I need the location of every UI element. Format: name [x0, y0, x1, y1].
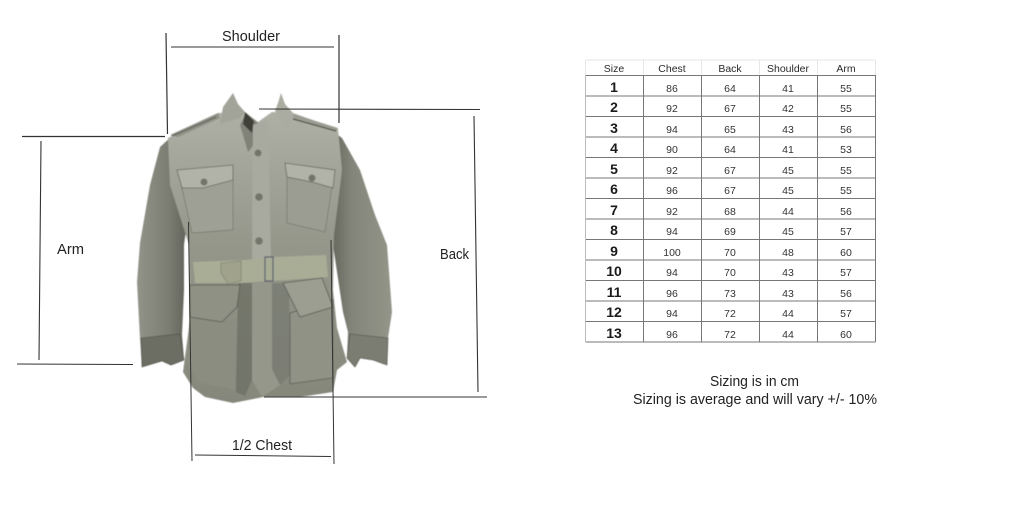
row 13: 13: [606, 325, 622, 341]
sizing note: Sizing is in cm: [710, 374, 799, 390]
row 13: 60: [840, 329, 852, 341]
row 6: 45: [782, 185, 794, 197]
jacket body: [168, 112, 347, 403]
row 10: 70: [724, 267, 736, 279]
row 8: 57: [840, 226, 852, 238]
row 6: 6: [610, 181, 618, 197]
row 1: 64: [724, 83, 736, 95]
row 6: 55: [840, 185, 852, 197]
row 9: 48: [782, 247, 794, 259]
row 11: 11: [607, 284, 622, 300]
row 11: [607, 284, 852, 300]
row 4: 41: [782, 144, 794, 156]
row 6: [610, 181, 852, 197]
row 2: [610, 99, 852, 115]
row 7: 92: [666, 206, 678, 218]
row 6: 67: [724, 185, 736, 197]
shoulder measurement: [166, 33, 339, 134]
row 10: 94: [666, 267, 678, 279]
row 5: 45: [782, 165, 794, 177]
row 5: 92: [666, 165, 678, 177]
table grid: [586, 60, 876, 342]
button placket: [252, 120, 271, 262]
row 3: [610, 120, 852, 136]
row 8: 69: [724, 226, 736, 238]
arm label: Arm: [57, 242, 84, 258]
row 13: 96: [666, 329, 678, 341]
row 4: 4: [610, 140, 618, 156]
sizing note: Sizing is average and will vary +/- 10%: [633, 392, 877, 408]
row 2: 42: [782, 103, 794, 115]
row 11: 96: [666, 288, 678, 300]
row 1: [610, 79, 852, 95]
row 8: 45: [782, 226, 794, 238]
shoulder label: Shoulder: [222, 29, 280, 45]
row 7: [610, 202, 852, 218]
belt: [193, 255, 328, 283]
row 3: 65: [724, 124, 736, 136]
row 1: 55: [840, 83, 852, 95]
row 3: 56: [840, 124, 852, 136]
row 2: 92: [666, 103, 678, 115]
row 5: 67: [724, 165, 736, 177]
row 7: 68: [724, 206, 736, 218]
row 5: [610, 161, 852, 177]
row 10: 57: [840, 267, 852, 279]
buttons: [254, 150, 262, 156]
row 5: 5: [610, 161, 618, 177]
body shading: [236, 283, 252, 396]
row 7: 44: [782, 206, 794, 218]
half chest measurement: [188, 222, 334, 464]
row 4: 53: [840, 144, 852, 156]
row 1: 86: [666, 83, 678, 95]
row 7: 56: [840, 206, 852, 218]
row 9: 100: [663, 247, 681, 259]
row 12: 72: [724, 308, 736, 320]
right sleeve: [325, 126, 392, 367]
row 13: 44: [782, 329, 794, 341]
half chest label: 1/2 Chest: [232, 438, 292, 454]
row 12: 94: [666, 308, 678, 320]
cuffs: [141, 334, 184, 367]
row 4: 90: [666, 144, 678, 156]
row 11: 43: [782, 288, 794, 300]
row 10: 10: [606, 263, 622, 279]
row 9: 70: [724, 247, 736, 259]
row 6: 96: [666, 185, 678, 197]
size table: [586, 60, 876, 342]
lower pocket left: [186, 315, 236, 390]
row 5: 55: [840, 165, 852, 177]
row 1: 1: [610, 79, 618, 95]
shoulder straps: [170, 113, 220, 137]
row 3: 94: [666, 124, 678, 136]
row 8: [610, 222, 852, 238]
lower pocket right: [290, 300, 333, 384]
row 9: 60: [840, 247, 852, 259]
row 8: 94: [666, 226, 678, 238]
row 13: [606, 325, 852, 341]
row 12: 12: [606, 304, 622, 320]
row 3: 43: [782, 124, 794, 136]
back measurement: [259, 109, 487, 397]
row 8: 8: [610, 222, 618, 238]
table header: Arm: [836, 63, 856, 75]
row 3: 3: [610, 120, 618, 136]
neck shadow: [243, 112, 254, 133]
row 2: 55: [840, 103, 852, 115]
table header: Shoulder: [767, 63, 810, 75]
row 13: 72: [724, 329, 736, 341]
table header: Back: [718, 63, 742, 75]
row 10: [606, 263, 852, 279]
row 10: 43: [782, 267, 794, 279]
collar: [220, 93, 245, 124]
row 1: 41: [782, 83, 794, 95]
left sleeve: [137, 136, 190, 367]
sizing note: [633, 374, 877, 408]
row 12: 57: [840, 308, 852, 320]
row 12: [606, 304, 852, 320]
jacket photo illustration: [137, 93, 392, 403]
row 2: 67: [724, 103, 736, 115]
table header: Chest: [658, 63, 686, 75]
breast pocket left: [179, 170, 233, 233]
row 7: 7: [610, 202, 618, 218]
table header: [604, 63, 856, 75]
row 4: 64: [724, 144, 736, 156]
row 9: 9: [610, 243, 618, 259]
breast pocket right: [287, 170, 333, 232]
row 9: [610, 243, 852, 259]
row 4: [610, 140, 852, 156]
arm measurement: [17, 136, 165, 364]
row 12: 44: [782, 308, 794, 320]
row 11: 73: [724, 288, 736, 300]
row 2: 2: [610, 99, 618, 115]
table header: Size: [604, 63, 624, 75]
row 11: 56: [840, 288, 852, 300]
back label: Back: [440, 247, 470, 263]
